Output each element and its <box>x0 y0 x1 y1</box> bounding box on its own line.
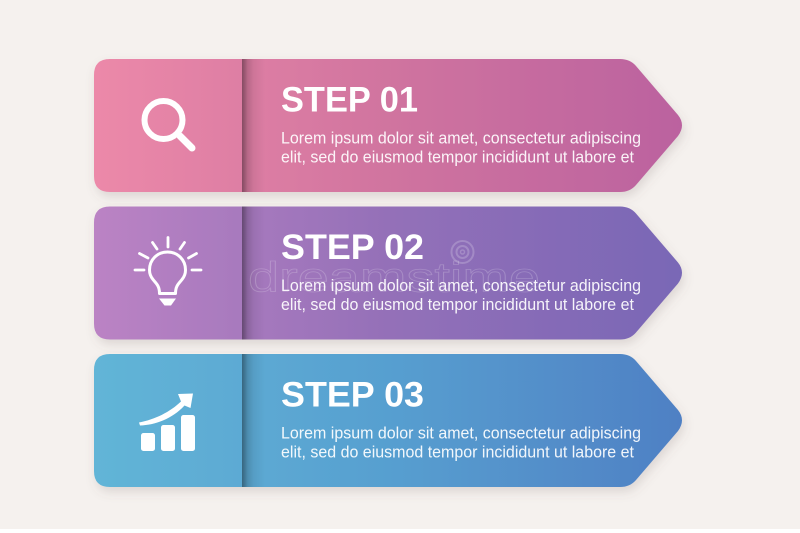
text block: step 02 <box>281 277 641 314</box>
arrow banner: step 02 <box>94 206 682 340</box>
heading: step 02: STEP 02 <box>281 228 424 267</box>
icon: growth chart <box>139 394 195 451</box>
heading: step 01: STEP 01 <box>281 80 418 120</box>
icon: magnifying glass <box>144 101 192 148</box>
arrow banner: step 01 <box>94 59 682 192</box>
watermark: dreamstime <box>248 254 540 300</box>
text block: step 01: Lorem ipsum dolor sit amet, consectetur adipiscing <box>281 130 641 148</box>
text block: step 03: elit, sed do eiusmod tempor incididunt ut labore et <box>281 444 634 462</box>
icon: light bulb <box>135 238 201 306</box>
panel: step 01 <box>94 59 682 192</box>
text block: step 03: Lorem ipsum dolor sit amet, consectetur adipiscing <box>281 424 641 442</box>
text block: step 01 <box>281 130 641 166</box>
text block: step 02: Lorem ipsum dolor sit amet, consectetur adipiscing <box>281 277 641 295</box>
fold shadow: step 01 <box>242 59 258 192</box>
panel: step 03 <box>94 354 682 487</box>
arrow banner: step 03 <box>94 354 682 487</box>
text block: step 03 <box>281 424 641 462</box>
heading: step 03: STEP 03 <box>281 376 424 414</box>
panel: step 02 <box>94 206 682 340</box>
watermark <box>248 241 540 300</box>
bottom white strip <box>0 529 800 533</box>
fold shadow: step 03 <box>242 354 258 487</box>
fold shadow: step 02 <box>242 206 258 340</box>
text block: step 01: elit, sed do eiusmod tempor incididunt ut labore et <box>281 148 634 166</box>
text block: step 02: elit, sed do eiusmod tempor incididunt ut labore et <box>281 296 634 314</box>
